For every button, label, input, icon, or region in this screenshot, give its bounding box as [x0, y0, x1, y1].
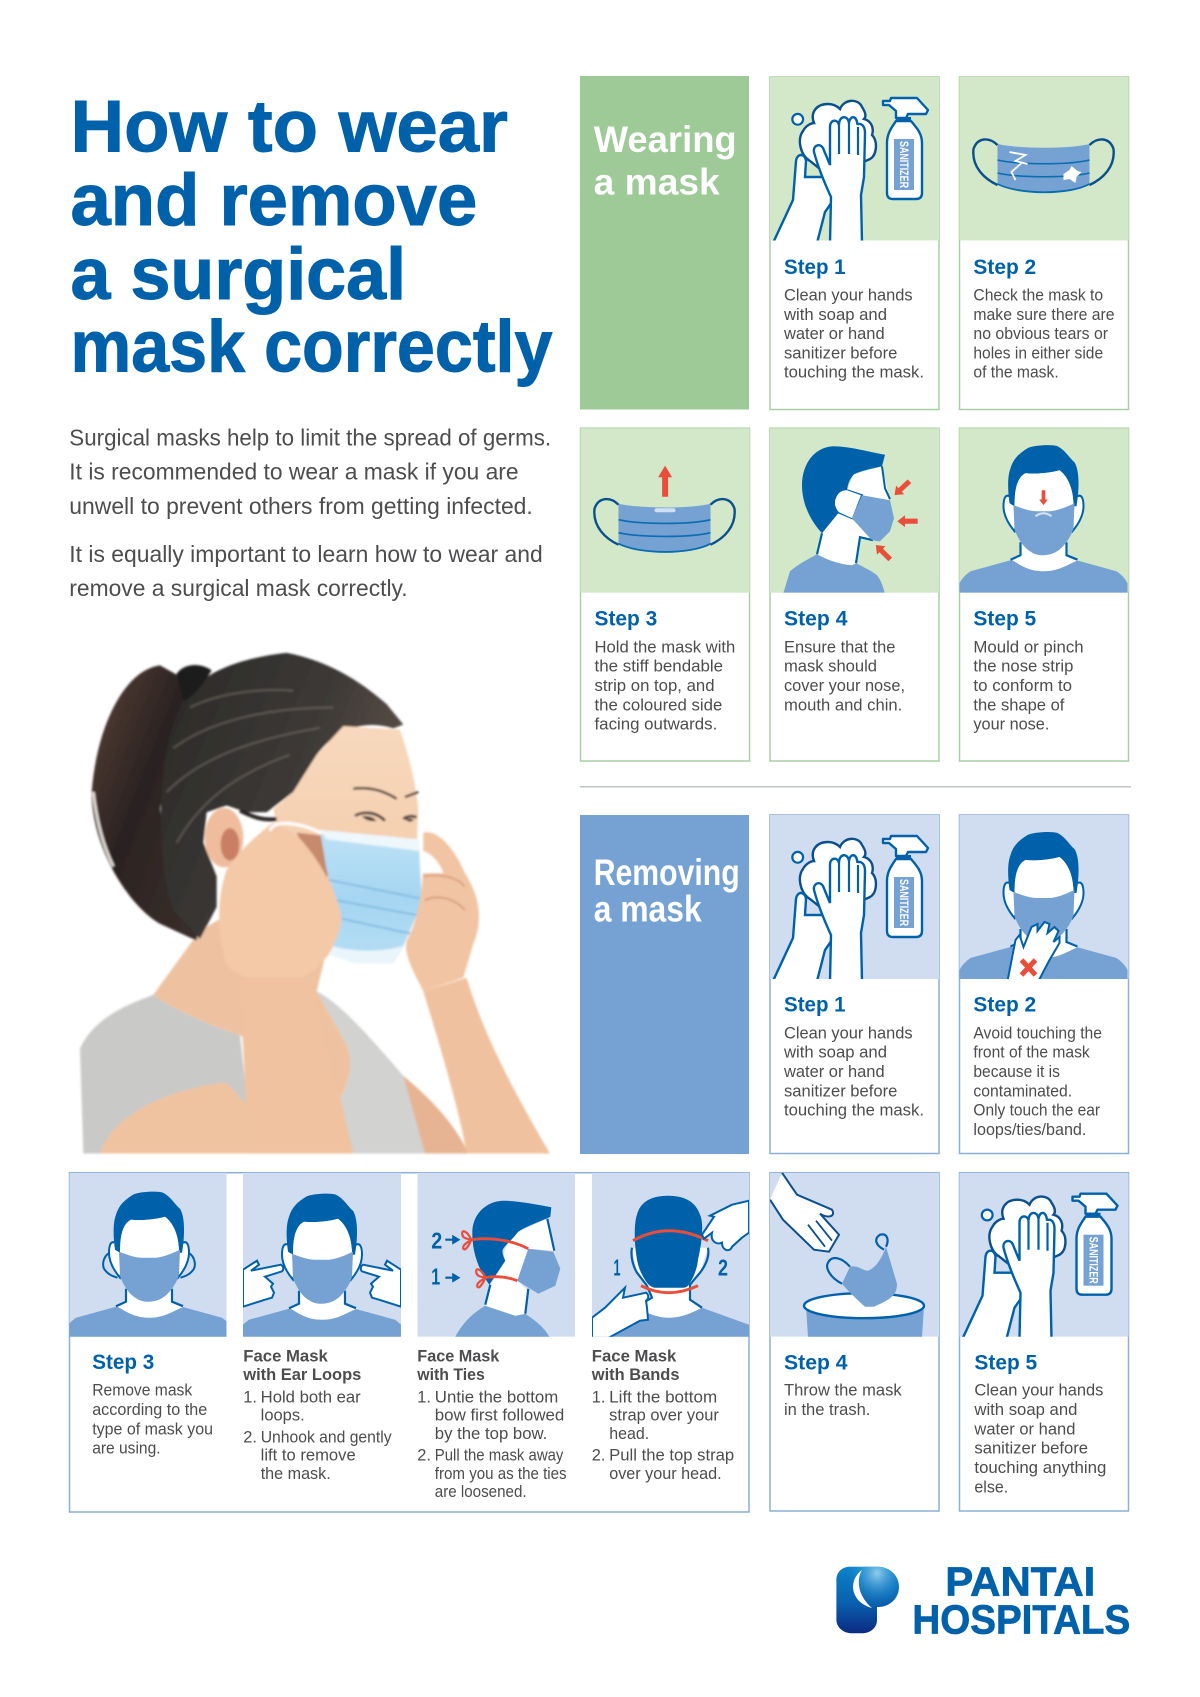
text: face mask with bands: Lift the bottom: [609, 1388, 717, 1406]
panel: wearing step 5: Step 5: [973, 607, 1036, 631]
text: face mask with bands: with Bands: [591, 1366, 680, 1384]
text: face mask with bands: head.: [609, 1425, 649, 1443]
intro text: remove a surgical mask correctly.: [69, 575, 408, 601]
panel: removing step 2: contaminated.: [973, 1082, 1072, 1100]
panel: wearing step 2: of the mask.: [973, 364, 1059, 382]
panel: wearing step 1: touching the mask.: [784, 364, 924, 382]
panel: wearing step 1: water or hand: [783, 325, 885, 343]
text: face mask with ties: 2.: [417, 1447, 431, 1465]
text: face mask with ties: bow first followed: [435, 1407, 564, 1425]
panel: removing a mask heading: Removing: [594, 852, 740, 893]
panel: wearing step 4: Ensure that the: [784, 638, 895, 656]
icon: side view with ties: [417, 1172, 575, 1337]
panel: wearing step 5: [960, 428, 1128, 761]
panel: wearing step 1: Step 1: [784, 255, 846, 279]
icon: side view with ties: 2: [431, 1228, 442, 1254]
panel: wearing step 3: Hold the mask with: [594, 638, 735, 656]
icon: washing hands with sanitizer: [770, 77, 939, 240]
text: face mask with ties: Untie the bottom: [435, 1388, 558, 1406]
text: face mask with ear loops: Hold both ear: [261, 1388, 361, 1406]
panel: removing step 3 with mask types: type of mask you: [92, 1420, 213, 1438]
panel: wearing step 1: sanitizer before: [784, 344, 897, 362]
panel: removing step 5: touching anything: [974, 1459, 1106, 1477]
panel: wearing step 3: Step 3: [594, 607, 657, 631]
intro text: It is recommended to wear a mask if you are: [69, 458, 519, 484]
panel: removing step 1: touching the mask.: [784, 1102, 924, 1120]
panel: removing step 2: Step 2: [973, 993, 1036, 1017]
panel: wearing step 3: the coloured side: [594, 696, 722, 714]
icon: washing hands with sanitizer: SANITIZER: [1086, 1237, 1100, 1284]
panel: wearing step 1: Clean your hands: [784, 287, 913, 305]
text: face mask with ties: Face Mask: [417, 1348, 500, 1366]
text: face mask with ear loops: the mask.: [261, 1465, 331, 1483]
panel: removing a mask heading: a mask: [594, 889, 702, 930]
panel: removing step 1: Clean your hands: [784, 1024, 913, 1042]
panel: wearing step 4: mouth and chin.: [784, 696, 902, 714]
icon: back view with bands: 1: [614, 1255, 621, 1281]
logo: Pantai Hospitals: HOSPITALS: [912, 1596, 1130, 1642]
text: face mask with ear loops: lift to remove: [261, 1447, 356, 1465]
panel: wearing step 2: [960, 77, 1128, 410]
icon: front view with ear loops: [70, 1172, 226, 1337]
panel: removing step 3 with mask types: are using.: [92, 1440, 161, 1458]
panel: wearing step 5: the nose strip: [973, 658, 1073, 676]
intro text: [69, 424, 551, 601]
panel: wearing step 5: the shape of: [973, 696, 1065, 714]
panel: wearing step 2: no obvious tears or: [973, 325, 1109, 343]
title: a surgical: [70, 234, 406, 315]
icon: mask with nose strip and up arrow: [580, 428, 750, 593]
panel: removing step 5: Step 5: [974, 1350, 1037, 1374]
icon: logo mark: [836, 1567, 899, 1633]
title: [70, 86, 553, 388]
panel: wearing step 4: mask should: [784, 658, 877, 676]
panel: removing step 5: else.: [974, 1478, 1008, 1496]
title: mask correctly: [70, 306, 553, 388]
text: face mask with bands: Face Mask: [592, 1348, 677, 1366]
panel: wearing step 3: the stiff bendable: [594, 658, 723, 676]
panel: removing step 4: [770, 1173, 939, 1511]
panel: removing step 4: in the trash.: [784, 1401, 870, 1419]
panel: wearing step 2: Step 2: [973, 255, 1036, 279]
panel: removing step 5: [960, 1173, 1128, 1511]
intro text: unwell to prevent others from getting infected.: [69, 493, 533, 519]
text: face mask with ties: are loosened.: [435, 1483, 527, 1501]
panel: removing step 3 with mask types: Remove mask: [92, 1382, 193, 1400]
text: face mask with ties: [416, 1348, 567, 1501]
text: face mask with bands: [591, 1348, 734, 1483]
panel: wearing a mask heading: a mask: [594, 162, 720, 202]
text: face mask with ties: from you as the ties: [435, 1465, 567, 1483]
text: face mask with ear loops: Unhook and gently: [261, 1429, 392, 1447]
panel: removing step 1: Step 1: [784, 993, 846, 1017]
panel: wearing step 4: cover your nose,: [784, 677, 905, 695]
panel: wearing a mask heading: Wearing: [594, 119, 737, 160]
panel: removing step 5: sanitizer before: [974, 1440, 1088, 1458]
photo: woman putting on a surgical mask: [80, 653, 550, 1153]
icon: throwing mask in trash: [770, 1172, 939, 1337]
intro text: Surgical masks help to limit the spread of germs.: [69, 424, 551, 450]
panel: removing step 2: Only touch the ear: [973, 1102, 1101, 1120]
icon: back view with bands: [592, 1172, 749, 1337]
icon: do not touch the mask front: [960, 815, 1128, 979]
panel: removing step 3 with mask types: [65, 1173, 749, 1512]
logo: Pantai Hospitals: [836, 1559, 1130, 1642]
panel: removing step 4: Throw the mask: [784, 1382, 902, 1400]
intro text: It is equally important to learn how to wear and: [69, 541, 543, 567]
panel: removing step 5: Clean your hands: [974, 1382, 1103, 1400]
panel: wearing a mask heading: [580, 76, 749, 410]
panel: wearing step 3: strip on top, and: [594, 677, 714, 695]
title: How to wear: [70, 86, 508, 167]
icon: front view pinching nose strip: [960, 428, 1128, 593]
panel: removing step 2: front of the mask: [973, 1044, 1090, 1062]
text: face mask with bands: strap over your: [609, 1407, 719, 1425]
panel: wearing step 1: with soap and: [783, 306, 887, 324]
panel: wearing step 5: to conform to: [973, 677, 1072, 695]
text: face mask with ties: Pull the mask away: [435, 1447, 564, 1465]
text: face mask with ties: 1.: [417, 1388, 431, 1406]
text: face mask with ties: with Ties: [416, 1366, 485, 1384]
text: face mask with bands: 2.: [592, 1447, 605, 1465]
icon: side view with ties: 1: [431, 1264, 440, 1290]
panel: removing step 3 with mask types: Step 3: [92, 1350, 154, 1374]
panel: wearing step 5: Mould or pinch: [973, 638, 1084, 656]
panel: removing step 2: loops/ties/band.: [973, 1121, 1086, 1139]
text: face mask with bands: over your head.: [609, 1465, 722, 1483]
panel: removing step 2: Avoid touching the: [973, 1024, 1102, 1042]
icon: hands holding ear loops: [243, 1172, 401, 1337]
panel: removing step 4: Step 4: [784, 1350, 848, 1374]
panel: wearing step 3: [580, 428, 750, 761]
text: face mask with bands: Pull the top strap: [609, 1447, 734, 1465]
icon: mask with tears and holes: [960, 77, 1128, 240]
panel: removing a mask heading: [580, 815, 749, 1154]
icon: back view with bands: 2: [718, 1255, 728, 1281]
text: face mask with ties: by the top bow.: [435, 1425, 547, 1443]
panel: wearing step 2: make sure there are: [973, 306, 1115, 324]
icon: washing hands with sanitizer: [770, 815, 939, 979]
icon: washing hands with sanitizer: SANITIZER: [897, 879, 911, 926]
text: face mask with ear loops: with Ear Loops: [242, 1366, 361, 1384]
panel: removing step 1: sanitizer before: [784, 1082, 897, 1100]
icon: washing hands with sanitizer: SANITIZER: [897, 141, 911, 188]
text: face mask with ear loops: loops.: [261, 1407, 305, 1425]
panel: removing step 5: with soap and: [973, 1401, 1077, 1419]
panel: wearing step 1: [770, 77, 939, 410]
logo: Pantai Hospitals: PANTAI: [945, 1559, 1095, 1605]
text: face mask with bands: 1.: [592, 1388, 605, 1406]
panel: wearing step 2: holes in either side: [973, 344, 1103, 362]
panel: wearing step 4: Step 4: [784, 607, 848, 631]
panel: removing step 2: because it is: [973, 1063, 1060, 1081]
panel: wearing step 5: your nose.: [973, 716, 1049, 734]
panel: wearing step 3: facing outwards.: [594, 716, 717, 734]
panel: removing step 1: with soap and: [783, 1044, 887, 1062]
panel: wearing step 4: [770, 428, 939, 761]
title: and remove: [70, 160, 477, 241]
text: face mask with ear loops: 1.: [243, 1388, 257, 1406]
text: face mask with ear loops: Face Mask: [243, 1348, 329, 1366]
text: face mask with ear loops: [242, 1348, 392, 1483]
icon: washing hands with sanitizer: [960, 1172, 1128, 1337]
panel: removing step 2: [960, 815, 1128, 1154]
panel: removing step 1: water or hand: [783, 1063, 885, 1081]
panel: removing step 3 with mask types: according to the: [92, 1401, 207, 1419]
icon: side profile wearing mask with arrows: [770, 428, 939, 593]
panel: removing step 5: water or hand: [973, 1420, 1075, 1438]
panel: wearing step 2: Check the mask to: [973, 287, 1103, 305]
panel: removing step 1: [770, 815, 939, 1154]
text: face mask with ear loops: 2.: [243, 1429, 257, 1447]
